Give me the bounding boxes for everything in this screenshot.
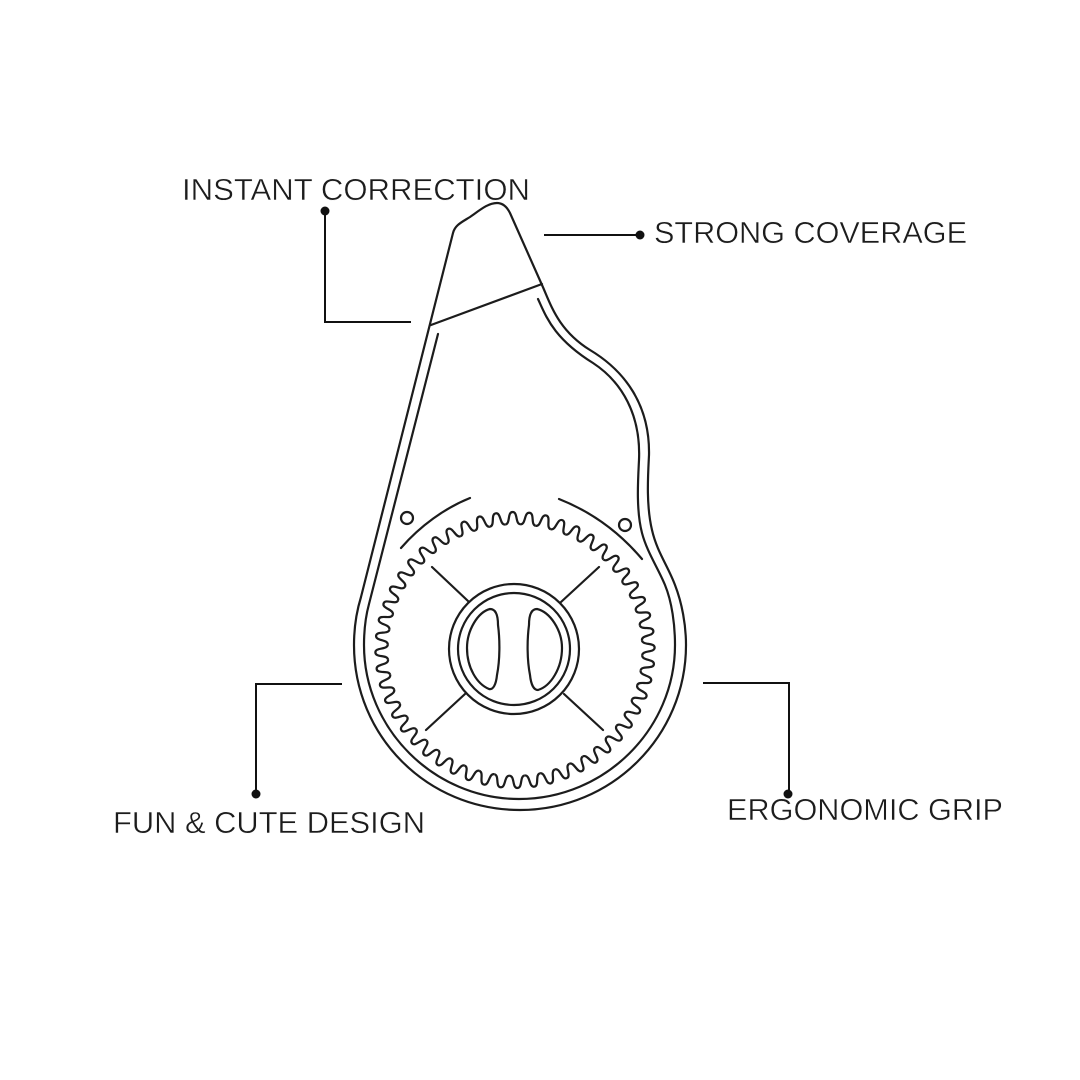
correction tape dispenser illustration [354,203,686,810]
outer body outline [354,203,686,810]
leader: ergonomic grip [703,683,792,798]
hub inner ring [458,593,570,705]
leader: strong coverage [544,230,644,240]
label: fun and cute design: FUN & CUTE DESIGN [113,806,425,840]
label: ergonomic grip: ERGONOMIC GRIP [727,793,1003,827]
leader: instant correction [320,206,411,322]
title label: instant correction: INSTANT CORRECTION [182,173,530,207]
leader: fun and cute design [252,684,342,798]
left arc [401,498,470,548]
right screw [619,519,631,531]
gear teeth ring [373,510,657,790]
label: strong coverage: STRONG COVERAGE [654,216,967,250]
right hub window [528,609,562,690]
inner body outline [364,299,675,799]
tip divider [431,284,542,325]
hub outer ring [449,584,579,714]
left hub window [467,609,499,689]
left screw [401,512,413,524]
right arc [559,499,642,559]
spokes [426,567,603,730]
